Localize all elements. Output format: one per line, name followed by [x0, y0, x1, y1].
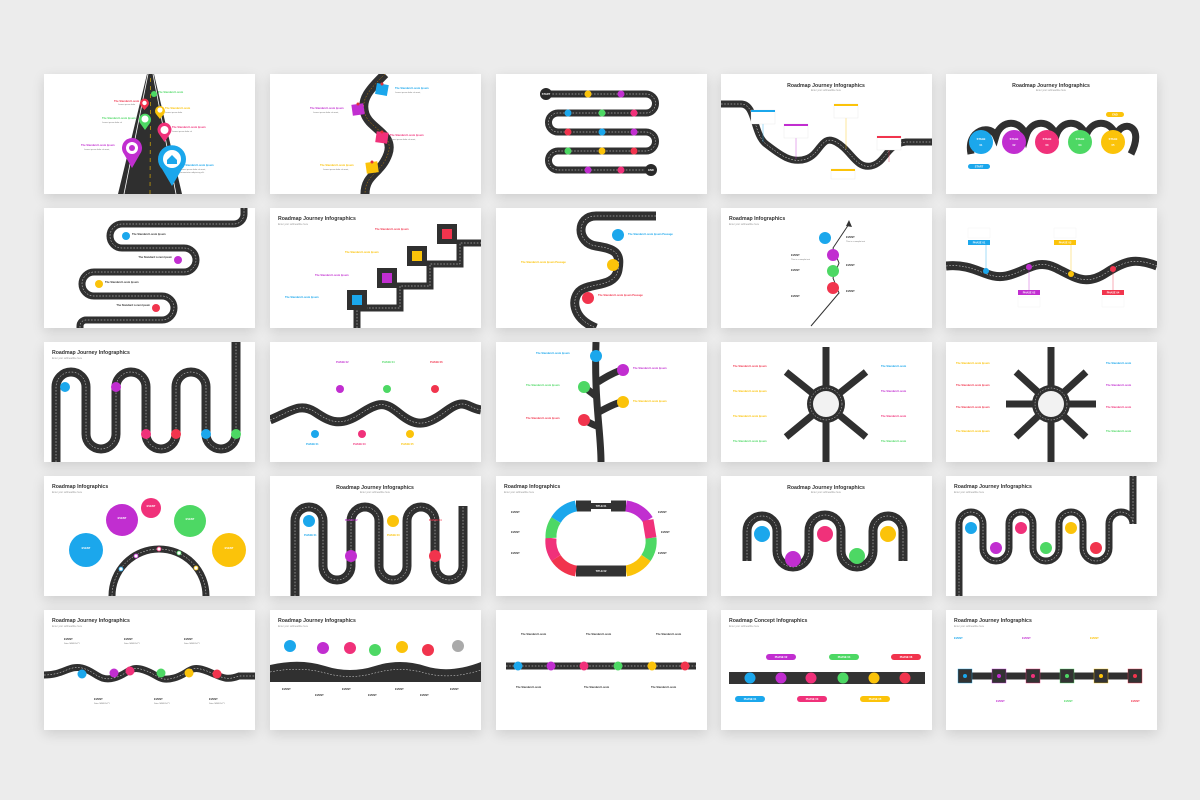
events: EVENT [420, 693, 429, 697]
road [546, 94, 656, 170]
title: Roadmap Journey Infographics [787, 83, 865, 89]
stages: STAGE [1109, 137, 1118, 141]
note: blue [375, 82, 389, 96]
title: Enter your subheadline here [504, 491, 535, 494]
labels: The Standard Lorem Ipsum [390, 133, 424, 137]
circles & text [95, 232, 182, 312]
phase labels: PHASE 02 [336, 360, 349, 364]
title: Roadmap Journey Infographics [954, 618, 1032, 624]
events: EVENT [368, 693, 377, 697]
phase labels: PHASE 04 [382, 360, 395, 364]
slide 23: straight road with circles [496, 610, 707, 730]
bubbles: EVENT [82, 546, 91, 550]
events: Date: MM/DD/YY [209, 702, 226, 705]
road [295, 506, 463, 596]
title [52, 618, 130, 628]
title [1012, 83, 1090, 92]
pins [284, 640, 464, 656]
labels: The Standard Lorem Ipsum [526, 416, 560, 420]
title [954, 484, 1032, 494]
events: EVENT [64, 637, 73, 641]
title pills: TITLE 01 [596, 504, 607, 508]
title: Roadmap Concept Infographics [729, 618, 808, 624]
road [729, 672, 925, 684]
events: EVENT [315, 693, 324, 697]
labels: The Standard Lorem Ipsum [633, 399, 667, 403]
road [56, 342, 236, 462]
phase labels: PHASE 02 [345, 518, 358, 522]
labels [521, 232, 673, 297]
labels: Lorem ipsum dolor sit [102, 121, 122, 124]
events: EVENT [511, 551, 520, 555]
road [946, 261, 1157, 280]
title [729, 216, 785, 226]
events: This is a sample text [846, 240, 865, 243]
slide 2: winding road with sticky notes [270, 74, 481, 194]
road [959, 476, 1133, 596]
labels [516, 632, 682, 689]
events: EVENT [184, 637, 193, 641]
title pills [591, 503, 611, 574]
events: EVENT [94, 697, 103, 701]
phase labels: PHASE 01 [306, 442, 319, 446]
title: Roadmap Journey Infographics [787, 485, 865, 491]
stages: STAGE [1076, 137, 1085, 141]
events: EVENT [846, 263, 855, 267]
road band [270, 662, 481, 682]
slide 17: serpentine with 4 circles [270, 476, 481, 596]
events [791, 235, 865, 298]
pills: PHASE 03 [806, 697, 819, 701]
circles & text: The Standard Lorem Ipsum [132, 232, 166, 236]
slide 4: winding road with callouts [721, 74, 932, 194]
road [118, 74, 182, 194]
ring [807, 385, 845, 423]
events: EVENT [154, 697, 163, 701]
road [80, 208, 244, 328]
connector dots [119, 547, 198, 571]
arrow road [811, 220, 852, 326]
stages: STAGE [977, 137, 986, 141]
events: EVENT [282, 687, 291, 691]
slide 15: roundabout 8 spokes [946, 342, 1157, 462]
pin: yellow [155, 106, 165, 119]
callouts [751, 104, 901, 179]
labels: The Standard Lorem [584, 685, 610, 689]
circles [514, 662, 690, 670]
labels: The Standard Lorem Ipsum [180, 163, 214, 167]
stages: 02 [1013, 143, 1016, 147]
labels: The Standard Lorem Ipsum [956, 361, 990, 365]
title: Roadmap Journey Infographics [52, 618, 130, 624]
slide 11: U serpentine with 6 circles [44, 342, 255, 462]
phases: PHASE 04 [1107, 290, 1120, 294]
circles [564, 90, 638, 174]
pin: green [139, 114, 151, 130]
phase labels [304, 518, 442, 537]
labels: The Standard Lorem [114, 99, 140, 103]
labels [81, 90, 214, 174]
events: EVENT [996, 699, 1005, 703]
title [787, 83, 865, 92]
title [729, 618, 808, 628]
labels: Lorem ipsum dolor sit amet, [84, 148, 110, 151]
events: EVENT [658, 551, 667, 555]
note: yellow [365, 160, 379, 174]
slide 22: road with pins above [270, 610, 481, 730]
labels: The Standard Lorem [1106, 361, 1132, 365]
phase labels: PHASE 03 [387, 533, 400, 537]
slide 21: wavy road with events [44, 610, 255, 730]
labels: Lorem ipsum dolor sit amet, [180, 168, 206, 171]
title [336, 485, 414, 494]
title: Roadmap Journey Infographics [52, 350, 130, 356]
road [747, 515, 903, 567]
slide 24: concept road with pills [721, 610, 932, 730]
title: Roadmap Infographics [504, 484, 560, 490]
events: EVENT [124, 637, 133, 641]
bubbles: EVENT [118, 516, 127, 520]
events: EVENT [954, 636, 963, 640]
events: EVENT [1064, 699, 1073, 703]
spokes [1006, 347, 1096, 462]
labels: The Standard Lorem Ipsum [633, 366, 667, 370]
labels: The Standard Lorem Ipsum [375, 227, 409, 231]
stages: STAGE [1010, 137, 1019, 141]
labels: The Standard Lorem Ipsum [285, 295, 319, 299]
events: This is a sample text [791, 258, 810, 261]
labels: The Standard Lorem Ipsum Passage [598, 293, 643, 297]
title: Enter your subheadline here [954, 625, 985, 628]
pin: red [140, 99, 149, 110]
slide 18: segmented ring [496, 476, 707, 596]
events: EVENT [511, 530, 520, 534]
title [278, 216, 356, 226]
circles [754, 526, 896, 567]
text boxes [968, 228, 1124, 307]
road [575, 216, 656, 328]
title: Roadmap Infographics [52, 484, 108, 490]
labels: Lorem ipsum dolor sit amet, [313, 111, 339, 114]
labels: The Standard Lorem Ipsum [315, 273, 349, 277]
labels: The Standard Lorem Ipsum [733, 439, 767, 443]
slide 8: S-curve with 3 circles [496, 208, 707, 328]
phases [968, 240, 1124, 295]
labels: The Standard Lorem Ipsum [320, 163, 354, 167]
labels: The Standard Lorem [881, 389, 907, 393]
labels: The Standard Lorem Ipsum [733, 414, 767, 418]
title [278, 618, 356, 628]
events: EVENT [846, 289, 855, 293]
title: Enter your subheadline here [52, 491, 83, 494]
title: Enter your subheadline here [811, 89, 842, 92]
squares [347, 224, 457, 310]
road [270, 404, 481, 423]
slide 1: perspective road with pins [44, 74, 255, 194]
bubbles: EVENT [225, 546, 234, 550]
events: EVENT [342, 687, 351, 691]
phases: PHASE 01 [973, 240, 986, 244]
title: Enter your subheadline here [1036, 89, 1067, 92]
events [511, 510, 670, 555]
labels: The Standard Lorem Ipsum [172, 125, 206, 129]
labels: Lorem ipsum dolor sit amet, [395, 91, 421, 94]
labels: The Standard Lorem Ipsum [526, 383, 560, 387]
start / end markers: END [648, 168, 654, 172]
road [364, 74, 389, 194]
events: EVENT [1131, 699, 1140, 703]
road [357, 243, 481, 328]
title pills: TITLE 02 [596, 569, 607, 573]
title: Enter your subheadline here [729, 625, 760, 628]
events: EVENT [791, 294, 800, 298]
labels [310, 86, 429, 171]
labels: The Standard Lorem [881, 414, 907, 418]
start / end pills: START [975, 164, 984, 168]
circles [60, 382, 241, 439]
title: Enter your subheadline here [52, 625, 83, 628]
labels: The Standard Lorem Ipsum [102, 116, 136, 120]
pills [735, 654, 921, 702]
labels: The Standard Lorem Ipsum [733, 389, 767, 393]
events: Date: MM/DD/YY [124, 642, 141, 645]
labels: The Standard Lorem Ipsum [956, 405, 990, 409]
bubbles: EVENT [186, 517, 195, 521]
events: EVENT [511, 510, 520, 514]
labels: consectetur adipiscing elit. [180, 171, 205, 174]
labels [285, 227, 409, 299]
labels [526, 351, 667, 420]
circles [819, 232, 839, 294]
start / end markers: START [542, 92, 551, 96]
stages: 04 [1079, 143, 1082, 147]
pills: PHASE 02 [775, 655, 788, 659]
start / end pills [968, 112, 1124, 169]
phase labels: PHASE 01 [304, 533, 317, 537]
slide 10: wavy road with phases [946, 208, 1157, 328]
circles & text: The Standard Lorem Ipsum [138, 255, 173, 259]
slide 19: inverted U with 5 circles [721, 476, 932, 596]
labels: The Standard Lorem Ipsum Passage [628, 232, 673, 236]
events: EVENT [209, 697, 218, 701]
title: Enter your subheadline here [954, 491, 985, 494]
slide 12: wavy road with pins [270, 342, 481, 462]
labels: The Standard Lorem [656, 632, 682, 636]
start / end markers [540, 88, 657, 176]
events: EVENT [658, 510, 667, 514]
labels: Lorem ipsum dolor [118, 103, 136, 106]
bubbles: EVENT [147, 504, 156, 508]
ring segments [551, 506, 651, 571]
title [787, 485, 865, 494]
bubbles [69, 498, 246, 567]
title [52, 484, 108, 494]
title: Enter your subheadline here [811, 491, 842, 494]
phase labels: PHASE 04 [429, 518, 442, 522]
labels: The Standard Lorem [158, 90, 184, 94]
labels: The Standard Lorem [881, 364, 907, 368]
title [954, 618, 1032, 628]
title: Enter your subheadline here [360, 491, 391, 494]
events: EVENT [1022, 636, 1031, 640]
road [961, 672, 1141, 680]
events: EVENT [661, 530, 670, 534]
labels: The Standard Lorem Ipsum [310, 106, 344, 110]
slide 5: stage circles [946, 74, 1157, 194]
pin: magenta [122, 138, 142, 168]
title: Enter your subheadline here [278, 625, 309, 628]
road [721, 104, 932, 166]
labels: The Standard Lorem [1106, 405, 1132, 409]
events [64, 637, 226, 705]
circles & text: The Standard Lorem Ipsum [116, 303, 151, 307]
circles [965, 522, 1102, 554]
pin: pink [158, 123, 172, 142]
events: Date: MM/DD/YY [154, 702, 171, 705]
ring [1032, 385, 1070, 423]
title: Roadmap Journey Infographics [954, 484, 1032, 490]
stages [969, 130, 1125, 154]
pills: PHASE 05 [869, 697, 882, 701]
slide 20: serpentine with 6 circles [946, 476, 1157, 596]
pills: PHASE 06 [900, 655, 913, 659]
stages: STAGE [1043, 137, 1052, 141]
labels: The Standard Lorem Ipsum [956, 429, 990, 433]
events: EVENT [791, 268, 800, 272]
phases: PHASE 03 [1059, 240, 1072, 244]
title: Roadmap Infographics [729, 216, 785, 222]
labels: The Standard Lorem [516, 685, 542, 689]
events: EVENT [450, 687, 459, 691]
labels: The Standard Lorem Ipsum [956, 383, 990, 387]
title [52, 350, 130, 360]
pills: PHASE 04 [838, 655, 851, 659]
labels: The Standard Lorem Ipsum Passage [521, 260, 566, 264]
phase labels: PHASE 05 [401, 442, 414, 446]
pin: blue home [158, 145, 186, 186]
events: Date: MM/DD/YY [184, 642, 201, 645]
road [506, 662, 696, 670]
phase labels [306, 360, 443, 446]
circles [303, 515, 441, 562]
labels: The Standard Lorem [651, 685, 677, 689]
title: Roadmap Journey Infographics [278, 618, 356, 624]
events: Date: MM/DD/YY [64, 642, 81, 645]
title: Enter your subheadline here [729, 223, 760, 226]
labels: The Standard Lorem [1106, 429, 1132, 433]
labels: The Standard Lorem Ipsum [395, 86, 429, 90]
title: Enter your subheadline here [278, 223, 309, 226]
arch road [112, 549, 206, 596]
events: Date: MM/DD/YY [94, 702, 111, 705]
note: pink [375, 130, 389, 144]
events: EVENT [395, 687, 404, 691]
labels: The Standard Lorem [881, 439, 907, 443]
road [584, 342, 621, 462]
pin: green top [151, 91, 157, 97]
slide 14: roundabout 6 spokes [721, 342, 932, 462]
labels: The Standard Lorem Ipsum [536, 351, 570, 355]
events [282, 687, 459, 697]
labels: The Standard Lorem Ipsum [81, 143, 115, 147]
title [504, 484, 560, 494]
labels: Lorem ipsum dolor sit amet, [390, 138, 416, 141]
labels: Lorem ipsum dolor [165, 111, 183, 114]
road loops [970, 123, 1136, 154]
title: Roadmap Journey Infographics [1012, 83, 1090, 89]
stages: 05 [1112, 143, 1115, 147]
slide 13: tree road [496, 342, 707, 462]
title: Roadmap Journey Infographics [336, 485, 414, 491]
start / end pills: END [1112, 112, 1118, 116]
events: EVENT [846, 235, 855, 239]
circles [582, 229, 624, 304]
labels: The Standard Lorem [1106, 383, 1132, 387]
stages: 01 [980, 143, 983, 147]
labels: The Standard Lorem [586, 632, 612, 636]
circles [78, 666, 222, 678]
labels [733, 364, 907, 443]
circles [744, 672, 910, 684]
road [44, 667, 255, 679]
pills: PHASE 01 [744, 697, 757, 701]
labels: The Standard Lorem [521, 632, 547, 636]
slide 16: arch with bubbles [44, 476, 255, 596]
note: magenta [351, 102, 365, 116]
slide 6: serpentine left [44, 208, 255, 328]
labels: The Standard Lorem Ipsum [733, 364, 767, 368]
phases: PHASE 02 [1023, 290, 1036, 294]
slide 25: road with squares [946, 610, 1157, 730]
phase labels: PHASE 03 [353, 442, 366, 446]
labels: The Standard Lorem [165, 106, 191, 110]
circles [578, 350, 629, 426]
labels: The Standard Lorem Ipsum [345, 250, 379, 254]
labels: Lorem ipsum dolor sit [172, 130, 192, 133]
pins [311, 385, 439, 438]
squares [958, 669, 1142, 683]
title: Enter your subheadline here [52, 357, 83, 360]
circles & text: The Standard Lorem Ipsum [105, 280, 139, 284]
labels: Lorem ipsum dolor sit amet, [323, 168, 349, 171]
events [954, 636, 1140, 703]
events: EVENT [791, 253, 800, 257]
spokes [786, 347, 866, 462]
phase labels: PHASE 06 [430, 360, 443, 364]
labels [956, 361, 1132, 433]
events: EVENT [1090, 636, 1099, 640]
stages: 03 [1046, 143, 1049, 147]
slide 7: staircase squares [270, 208, 481, 328]
title: Roadmap Journey Infographics [278, 216, 356, 222]
slide 3: serpentine rows with circles [496, 74, 707, 194]
slide 9: diagonal with 4 circles [721, 208, 932, 328]
